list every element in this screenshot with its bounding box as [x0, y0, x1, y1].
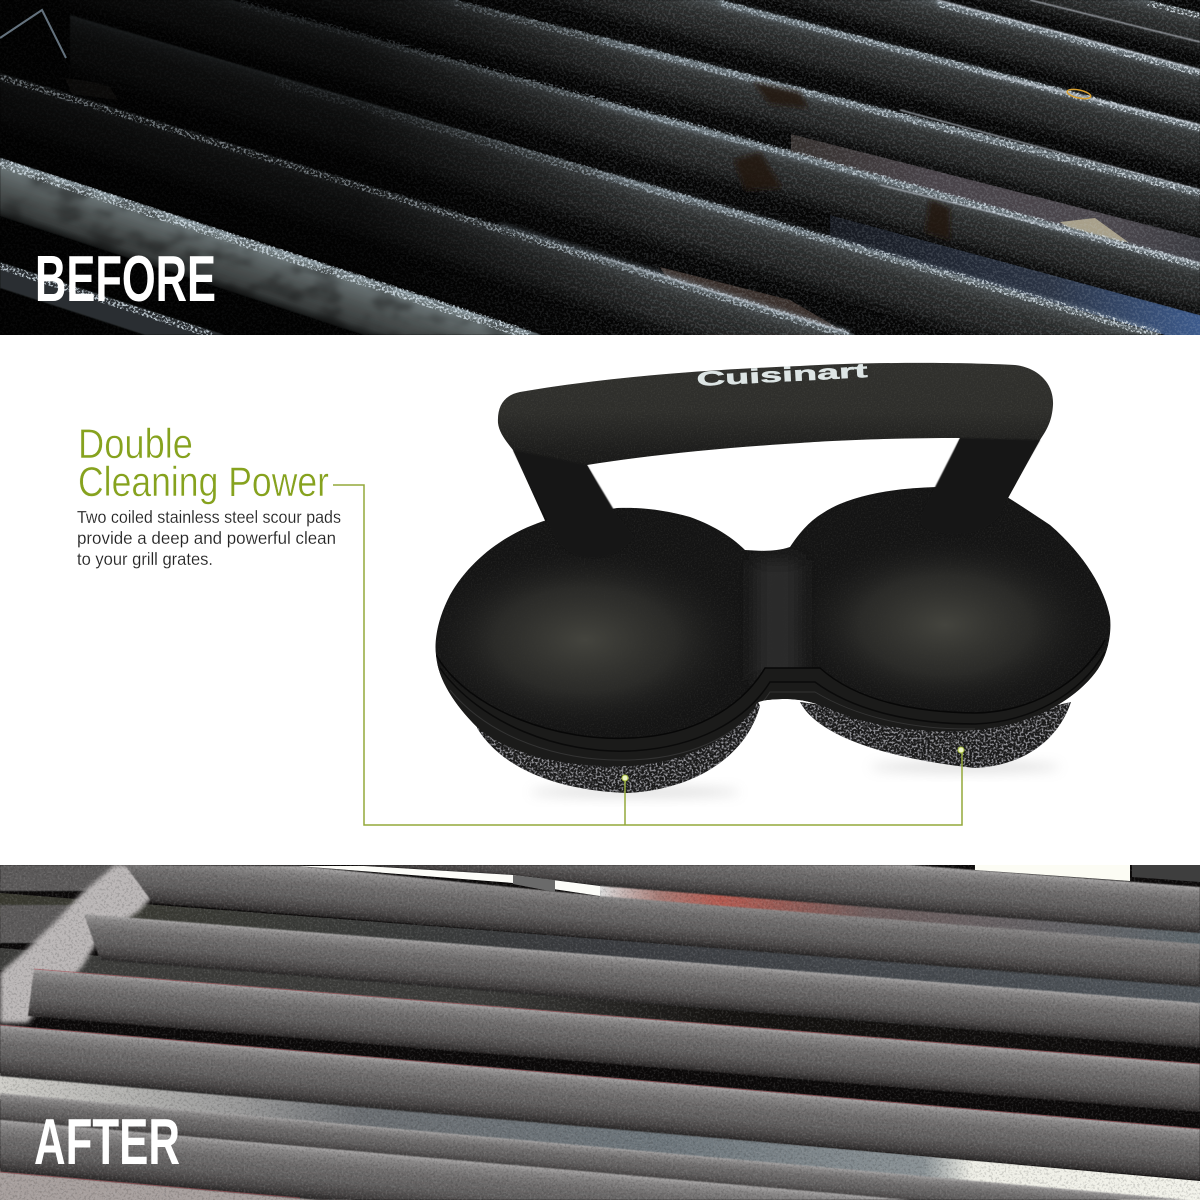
soft glow along bar tops [500, 3, 1200, 333]
heading: Double Cleaning Power: Double [78, 420, 193, 467]
body text: scour pad description: provide a deep and powerful clean [77, 528, 336, 548]
grate bars [0, 865, 1200, 1200]
bright glare top right [975, 865, 1130, 881]
diagonal crossbar [0, 865, 157, 1023]
surface grain [0, 865, 1200, 1200]
brand logo: Cuisinart: Cuisinart [696, 360, 869, 391]
red edge reflections [0, 969, 1200, 1198]
left handle leg [513, 450, 634, 558]
rim band [437, 644, 1108, 766]
left bar stubs [0, 865, 125, 943]
body text: scour pad description: Two coiled stainless steel scour pads [77, 507, 341, 527]
body domes [436, 487, 1110, 766]
body text: scour pad description [77, 507, 341, 569]
handle [498, 363, 1053, 525]
label: BEFORE: BEFORE [35, 242, 216, 315]
body text: scour pad description: to your grill grates. [77, 549, 213, 569]
heading: Double Cleaning Power: Cleaning Power [78, 458, 329, 505]
heading: Double Cleaning Power [78, 420, 329, 505]
icon: left pad dot [622, 775, 628, 781]
pad shadows [530, 762, 1060, 797]
crossbar glints [0, 10, 66, 58]
bright glare strip [298, 866, 600, 896]
icon: yellow glint [1066, 88, 1092, 100]
label: AFTER: AFTER [34, 1105, 180, 1178]
panel: before photo of dirty grill grates [0, 0, 1200, 335]
steel scour pads [477, 700, 1071, 793]
burnt grease deposits [734, 82, 950, 240]
product: Cuisinart double scour brush [420, 360, 1115, 797]
panel: after photo of clean grill grates [0, 865, 1200, 1200]
panel: callout text and product [77, 360, 1115, 825]
right handle leg [921, 438, 1040, 534]
connector line: heading to scour pads [333, 485, 962, 825]
icon: right pad dot [958, 747, 964, 753]
